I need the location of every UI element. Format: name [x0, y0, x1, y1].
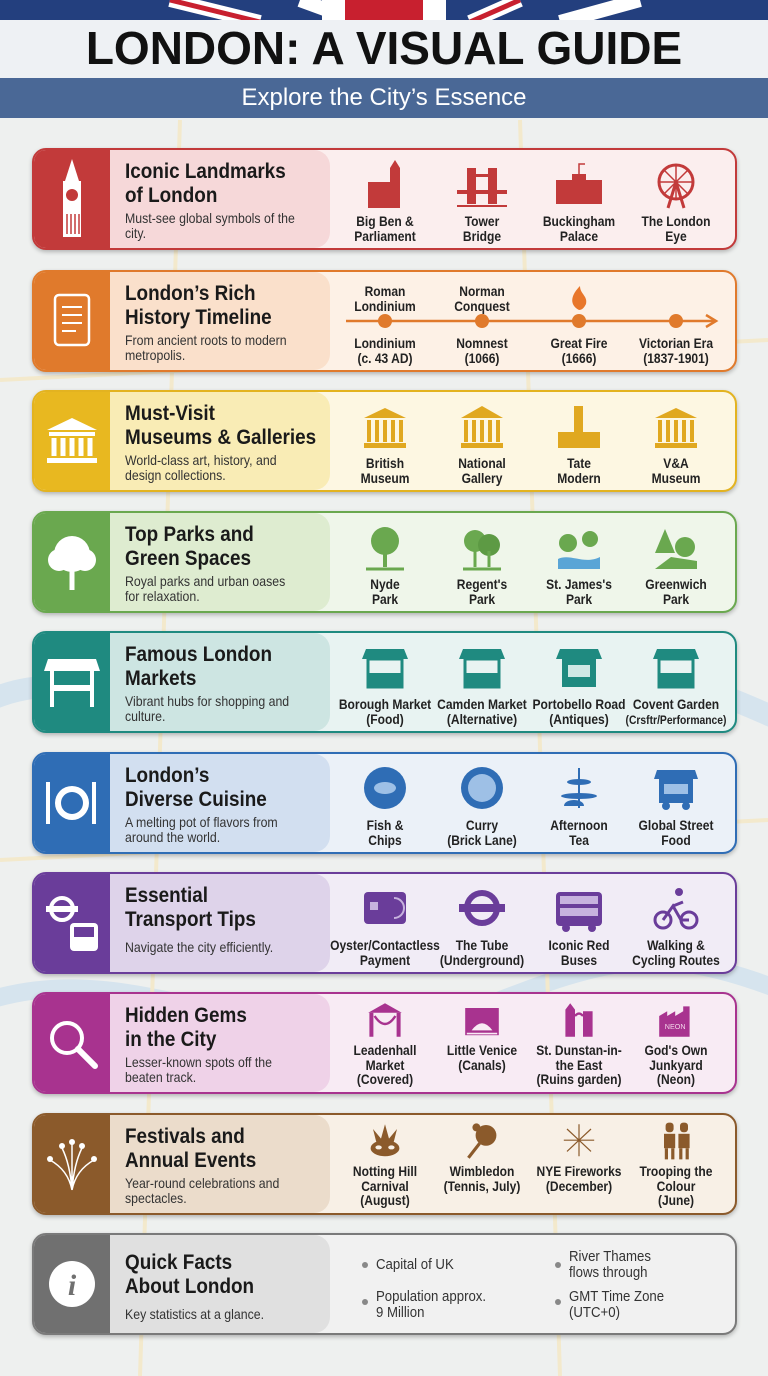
item: Camden: (Alternative) — [447, 711, 517, 727]
item: London Eye: Eye — [665, 228, 687, 244]
item: Portobello: Portobello Road — [533, 696, 625, 712]
timeline chart: Londinium — [354, 335, 416, 351]
panel: parks — [32, 511, 737, 613]
item: NYE Fireworks: (December) — [546, 1178, 612, 1194]
heading — [125, 402, 316, 449]
item: Regent's Park: Regent's — [457, 576, 507, 592]
item: Bus: Iconic Red — [549, 937, 609, 953]
timeline chart: Victorian Era — [639, 335, 713, 351]
icon: scroll — [34, 272, 110, 370]
item: God's Own Junkyard: Junkyard — [649, 1056, 703, 1072]
item: Regent's Park: Park — [469, 591, 495, 607]
heading: Top Parks and — [125, 523, 254, 546]
item: Afternoon Tea: Tea — [569, 832, 589, 848]
heading: Museums & Galleries — [125, 426, 316, 449]
fact list: 9 Million — [376, 1304, 424, 1321]
panel: quick facts — [32, 1233, 737, 1335]
item: Buckingham: Palace — [560, 228, 598, 244]
item: Borough Market: Borough Market — [339, 696, 431, 712]
item: Trooping — [611, 1121, 741, 1208]
item: V&A: V&A — [663, 455, 689, 471]
item: Wimbledon: (Tennis, July) — [444, 1178, 520, 1194]
heading — [125, 1004, 247, 1051]
panel: festivals — [32, 1113, 737, 1215]
heading — [125, 1251, 254, 1299]
heading: Markets — [125, 667, 196, 690]
icon: stall — [34, 633, 110, 731]
item: Fish & Chips: Chips — [368, 832, 402, 848]
heading: Iconic Landmarks — [125, 160, 286, 183]
panel: festivals: Year-round celebrations and spectacles. — [125, 1175, 279, 1206]
heading — [125, 1125, 256, 1172]
timeline chart: Great Fire — [551, 335, 607, 351]
timeline chart: Conquest — [454, 298, 510, 314]
panel: hidden gems — [32, 992, 737, 1094]
panel: transport: Navigate the city efficiently. — [125, 939, 273, 955]
item: Regent's Park — [457, 530, 507, 607]
panel: parks: Royal parks and urban oases for relaxation. — [125, 573, 285, 604]
item: God's Own Junkyard: NEON — [665, 1022, 686, 1031]
item: Tate Modern: Tate — [567, 455, 591, 471]
item: Trooping: Trooping the — [640, 1163, 712, 1179]
heading: About London — [125, 1275, 254, 1298]
item: NYE Fireworks — [514, 1121, 644, 1193]
fact list: Population approx. — [376, 1288, 486, 1305]
item: Notting Hill: (August) — [360, 1192, 410, 1208]
timeline chart: Londinium — [354, 298, 416, 314]
item: Tower Bridge: Bridge — [463, 228, 501, 244]
item: Curry: Curry — [466, 817, 498, 833]
icon: big ben — [34, 150, 110, 248]
icon: fireworks — [34, 1115, 110, 1213]
timeline chart: Roman — [365, 283, 405, 299]
item: Tube — [440, 890, 524, 968]
timeline chart: (1837-1901) — [643, 350, 709, 366]
icon: magnifier — [34, 994, 110, 1092]
item: National Gallery: Gallery — [462, 470, 502, 486]
item: Greenwich Park — [645, 529, 707, 607]
icon: tree — [34, 513, 110, 611]
item: Notting Hill — [353, 1124, 417, 1208]
heading: Essential — [125, 884, 208, 907]
panel: transport — [32, 872, 737, 974]
heading: Hidden Gems — [125, 1004, 247, 1027]
item: Hyde Park: Nyde — [370, 576, 400, 592]
heading — [125, 160, 286, 207]
item: God's Own Junkyard: God's Own — [644, 1042, 708, 1058]
icon: plate — [34, 754, 110, 852]
item: God's Own Junkyard: (Neon) — [657, 1071, 695, 1087]
item: Oyster: Payment — [360, 952, 410, 968]
item: London Eye: The London — [642, 213, 710, 229]
heading: Annual Events — [125, 1149, 256, 1172]
item: Leadenhall: Market — [366, 1056, 404, 1072]
item: God's Own Junkyard — [644, 1006, 708, 1087]
panel: history timeline — [32, 270, 737, 372]
item: Camden — [437, 649, 527, 727]
fact list: (UTC+0) — [569, 1304, 620, 1321]
item: Fish & Chips: Fish & — [367, 817, 403, 833]
item: V&A: Museum — [652, 470, 700, 486]
item: Little Venice: Little Venice — [447, 1042, 517, 1058]
item: Greenwich Park: Park — [663, 591, 689, 607]
panel: history timeline: From ancient roots to modern metropolis. — [125, 332, 287, 363]
panel: cuisine: A melting pot of flavors from around the world. — [125, 814, 278, 845]
item: Street Food: Global Street — [639, 817, 713, 833]
item: Afternoon Tea: Afternoon — [550, 817, 608, 833]
heading: London’s Rich — [125, 282, 256, 305]
item: British Museum: British — [366, 455, 404, 471]
item: Hyde Park: Park — [372, 591, 398, 607]
fact list: Capital of UK — [376, 1256, 454, 1273]
item: Curry: (Brick Lane) — [447, 832, 517, 848]
heading: Transport Tips — [125, 908, 256, 931]
item: Tube: The Tube — [456, 937, 508, 953]
item: Portobello — [533, 649, 625, 727]
panel: quick facts: Key statistics at a glance. — [125, 1306, 264, 1322]
item: Bus — [549, 892, 609, 968]
heading — [125, 282, 272, 329]
panel: cuisine — [32, 752, 737, 854]
item: Oyster: Oyster/Contactless — [330, 937, 440, 953]
item: Big Ben — [354, 160, 416, 244]
title — [0, 20, 768, 78]
fact list — [354, 1235, 734, 1335]
item: Tower Bridge — [457, 168, 507, 244]
item: Afternoon Tea — [550, 768, 608, 848]
icon: museum — [34, 392, 110, 490]
item: Buckingham — [543, 163, 615, 244]
item: National Gallery: National — [458, 455, 506, 471]
timeline chart: (1666) — [562, 350, 596, 366]
item: Trooping: (June) — [658, 1192, 694, 1208]
item: St Dunstan — [536, 1003, 622, 1087]
item: Notting Hill: Carnival — [361, 1178, 409, 1194]
heading — [125, 523, 254, 570]
panel: markets — [32, 631, 737, 733]
heading: of London — [125, 184, 217, 207]
fact list: GMT Time Zone — [569, 1288, 664, 1305]
title: LONDON: A VISUAL GUIDE — [86, 22, 682, 74]
item: British Museum: Museum — [361, 470, 409, 486]
item: Fish & Chips — [364, 767, 406, 848]
item: St James's Park — [546, 531, 612, 607]
timeline chart: Nomnest — [456, 335, 508, 351]
item: Leadenhall: Leadenhall — [354, 1042, 416, 1058]
item: London Eye — [642, 164, 710, 244]
item: Borough Market: (Food) — [366, 711, 404, 727]
heading — [125, 764, 267, 811]
panel: museums — [32, 390, 737, 492]
heading: Festivals and — [125, 1125, 245, 1148]
item: National Gallery — [458, 406, 506, 486]
item: V&A — [652, 408, 700, 486]
panel: markets: Vibrant hubs for shopping and culture. — [125, 693, 289, 724]
item: Curry — [447, 767, 517, 848]
panel: landmarks — [32, 148, 737, 250]
item: Camden: Camden Market — [437, 696, 527, 712]
item: NYE Fireworks: NYE Fireworks — [536, 1163, 621, 1179]
timeline chart: Norman — [459, 283, 505, 299]
heading — [125, 643, 272, 690]
item: Portobello: (Antiques) — [549, 711, 609, 727]
fact list: River Thames — [569, 1248, 651, 1265]
item: Hyde Park — [366, 527, 404, 607]
panel: hidden gems: Lesser-known spots off the beaten track. — [125, 1054, 272, 1085]
item: Borough Market — [339, 649, 431, 727]
item: Trooping: Colour — [657, 1178, 695, 1194]
item: Leadenhall: (Covered) — [357, 1071, 413, 1087]
heading: Must-Visit — [125, 402, 215, 425]
item: Tate Modern — [557, 406, 601, 486]
item: Cycling: Walking & — [647, 937, 705, 953]
item: Cycling — [632, 888, 720, 968]
item: Notting Hill: Notting Hill — [353, 1163, 417, 1179]
heading: in the City — [125, 1028, 216, 1051]
item: St James's Park: St. James's — [546, 576, 612, 592]
icon: roundel and bus — [34, 874, 110, 972]
heading: London’s — [125, 764, 209, 787]
item: Leadenhall — [354, 1003, 416, 1087]
item: Tube: (Underground) — [440, 952, 524, 968]
item: Big Ben: Parliament — [354, 228, 416, 244]
item: Oyster — [330, 892, 440, 968]
panel: museums: World-class art, history, and design collections. — [125, 452, 277, 483]
item: St Dunstan: St. Dunstan-in- — [536, 1042, 622, 1058]
item: Covent Garden: Covent Garden — [633, 696, 719, 712]
item: St Dunstan: (Ruins garden) — [537, 1071, 621, 1087]
timeline chart: (1066) — [465, 350, 499, 366]
heading: Diverse Cuisine — [125, 788, 267, 811]
heading: Green Spaces — [125, 547, 251, 570]
item: Bus: Buses — [561, 952, 597, 968]
item: Buckingham: Buckingham — [543, 213, 615, 229]
item: St Dunstan: the East — [556, 1056, 602, 1072]
timeline chart: (c. 43 AD) — [357, 350, 413, 366]
heading: Famous London — [125, 643, 272, 666]
item: St James's Park: Park — [566, 591, 592, 607]
subtitle — [0, 78, 768, 118]
heading: Quick Facts — [125, 1251, 232, 1274]
item: British Museum — [361, 408, 409, 486]
item: Covent Garden — [626, 649, 726, 727]
item: Street Food: Food — [661, 832, 691, 848]
item: Covent Garden: (Crsftr/Performance) — [626, 713, 726, 727]
item: Little Venice: (Canals) — [458, 1056, 506, 1072]
item: Tower Bridge: Tower — [465, 213, 499, 229]
item: Big Ben: Big Ben & — [356, 213, 414, 229]
heading — [125, 884, 256, 931]
item: Street Food — [639, 770, 714, 848]
icon: info: i — [68, 1269, 77, 1302]
item: Cycling: Cycling Routes — [632, 952, 720, 968]
fact list: flows through — [569, 1264, 648, 1281]
item: Tate Modern: Modern — [557, 470, 601, 486]
timeline chart — [346, 283, 718, 366]
header flag band — [0, 0, 768, 20]
item: Greenwich Park: Greenwich — [645, 576, 707, 592]
subtitle: Explore the City’s Essence — [241, 84, 527, 111]
heading: History Timeline — [125, 306, 272, 329]
item: Little Venice — [447, 1008, 517, 1073]
panel: landmarks: Must-see global symbols of the city. — [125, 210, 295, 241]
icon: info — [34, 1235, 110, 1333]
item: Wimbledon: Wimbledon — [450, 1163, 514, 1179]
item: Wimbledon — [417, 1121, 547, 1193]
